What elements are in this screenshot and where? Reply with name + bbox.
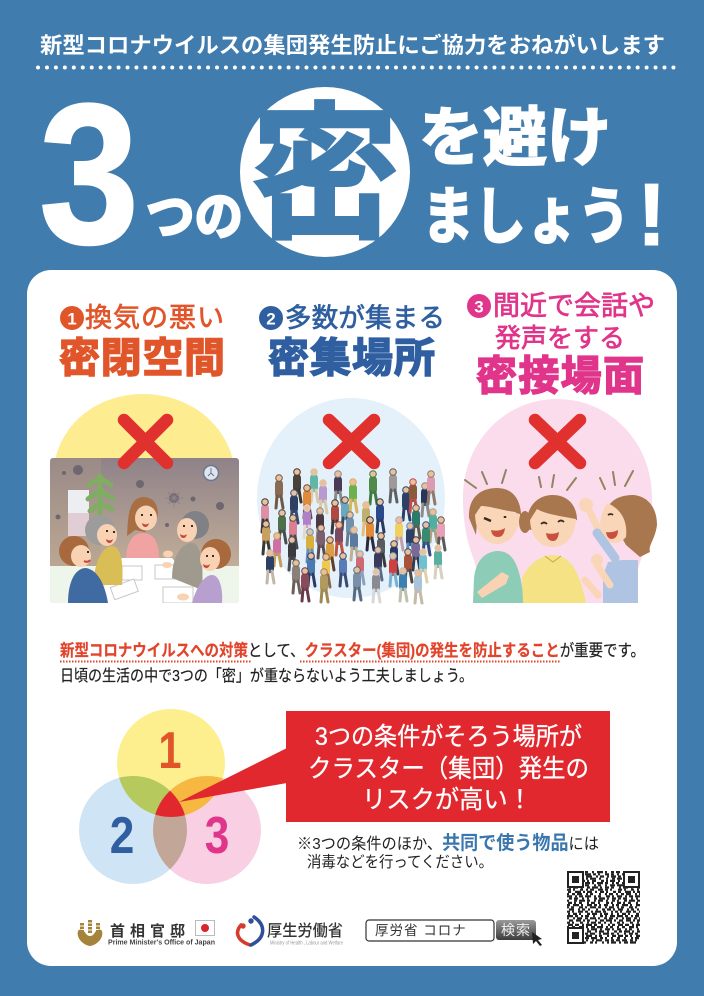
paulownia emblem bbox=[78, 920, 102, 946]
logo: Prime Minister's Office bbox=[78, 920, 215, 946]
illustration: meeting room bbox=[50, 458, 239, 603]
number 1: 1 bbox=[158, 721, 182, 779]
overlap 2 and 3 bbox=[153, 791, 187, 869]
panel: closed spaces bbox=[50, 303, 239, 603]
search box bbox=[366, 920, 542, 946]
illustration: three people talking bbox=[465, 470, 657, 603]
search box: 厚労省 コロナ bbox=[375, 923, 467, 938]
blue backdrop bbox=[257, 398, 445, 598]
cross mark bbox=[124, 420, 167, 463]
person: grey-haired man bbox=[162, 511, 209, 590]
search box: 検索 bbox=[501, 922, 531, 938]
venn diagram bbox=[79, 709, 261, 884]
cross mark bbox=[535, 420, 580, 463]
centre overlap bbox=[155, 790, 185, 817]
overlap 1 and 3 bbox=[156, 776, 223, 815]
white content panel bbox=[27, 270, 677, 966]
person: grey-haired woman bbox=[85, 515, 123, 585]
heading: close contact: 間近で会話や bbox=[493, 291, 655, 321]
logo: Prime Minister's Office: Prime Minister's Office of Japan bbox=[108, 940, 215, 946]
cross mark bbox=[329, 420, 374, 463]
overlap 1 and 2 bbox=[119, 776, 170, 815]
logo: Ministry of Health, Labour and Welfare: 厚生労働省 bbox=[267, 922, 343, 940]
heading: crowded places bbox=[259, 303, 445, 381]
logo: Ministry of Health, Labour and Welfare bbox=[238, 917, 343, 946]
number 2: 2 bbox=[110, 807, 134, 865]
top tagline: 新型コロナウイルスの集団発生防止にご協力をおねがいします bbox=[40, 33, 665, 58]
heart icon bbox=[238, 917, 263, 945]
red callout bbox=[179, 711, 610, 822]
logo: Ministry of Health, Labour and Welfare: Ministry of Health , Labour and Welfare bbox=[270, 940, 343, 946]
note: 消毒などを行ってください。 bbox=[307, 853, 493, 871]
callout box bbox=[286, 711, 610, 822]
pink backdrop bbox=[463, 399, 652, 603]
callout text: 3つの条件がそろう場所が bbox=[315, 723, 582, 751]
heading: closed spaces: 1 bbox=[67, 310, 77, 328]
person: woman in lavender bbox=[177, 539, 231, 603]
person: woman in pink bbox=[126, 497, 159, 558]
flag bbox=[196, 920, 214, 936]
title: exclamation mark: ! bbox=[637, 165, 666, 264]
person: man in blue bbox=[59, 536, 108, 603]
circle 2 bbox=[79, 776, 187, 884]
panel: crowded places bbox=[257, 303, 445, 603]
explanatory text bbox=[60, 640, 645, 685]
heading: crowded places: 密集場所 bbox=[268, 335, 435, 381]
heading: closed spaces: 密閉空間 bbox=[59, 335, 225, 381]
heading: closed spaces: 換気の悪い bbox=[85, 303, 224, 333]
heading: closed spaces bbox=[59, 303, 225, 381]
person: left woman bbox=[469, 488, 524, 603]
heading: close contact: 3 bbox=[474, 298, 484, 316]
circle 3 bbox=[153, 776, 261, 884]
emphasis lines bbox=[465, 470, 633, 490]
main title bbox=[39, 63, 666, 286]
title: circled mitsu emblem: 密 bbox=[251, 93, 399, 258]
note: ※3つの条件のほか、共同で使う物品には bbox=[297, 832, 599, 854]
note bbox=[297, 832, 599, 871]
QR code bbox=[567, 871, 640, 944]
heading: crowded places: 多数が集まる bbox=[285, 303, 445, 333]
person: centre woman bbox=[519, 495, 598, 603]
callout text: リスクが高い！ bbox=[362, 786, 532, 814]
panel: close contact bbox=[463, 291, 657, 603]
title: wo sake: を避け bbox=[419, 102, 611, 174]
dotted rule bbox=[38, 66, 674, 70]
yellow backdrop bbox=[55, 394, 233, 460]
heading: close contact: 発声をする bbox=[495, 323, 625, 353]
line one with highlights: 新型コロナウイルスへの対策として、クラスター(集団)の発生を防止することが重要です。 bbox=[60, 640, 645, 660]
number 3: 3 bbox=[205, 807, 229, 865]
heading: crowded places: 2 bbox=[266, 310, 276, 328]
title: tsu no: つの bbox=[146, 189, 243, 247]
circle 1 bbox=[117, 709, 225, 817]
callout text: クラスター（集団）発生の bbox=[308, 755, 589, 783]
logo: Prime Minister's Office: 首相官邸 bbox=[110, 922, 190, 940]
search button bbox=[496, 920, 536, 940]
heading: close contact: 密接場面 bbox=[476, 353, 644, 399]
illustration: crowd bbox=[262, 469, 445, 603]
callout text bbox=[308, 723, 589, 814]
line two: 日頃の生活の中で3つの「密」が重ならないよう工夫しましょう。 bbox=[60, 667, 473, 685]
heading: close contact bbox=[467, 291, 655, 399]
callout pointer bbox=[179, 748, 287, 802]
title: mashou: ましょう bbox=[422, 183, 630, 252]
title: numeral 3: 3 bbox=[39, 63, 139, 286]
person: right woman bbox=[579, 495, 657, 603]
cursor arrow bbox=[532, 932, 542, 946]
